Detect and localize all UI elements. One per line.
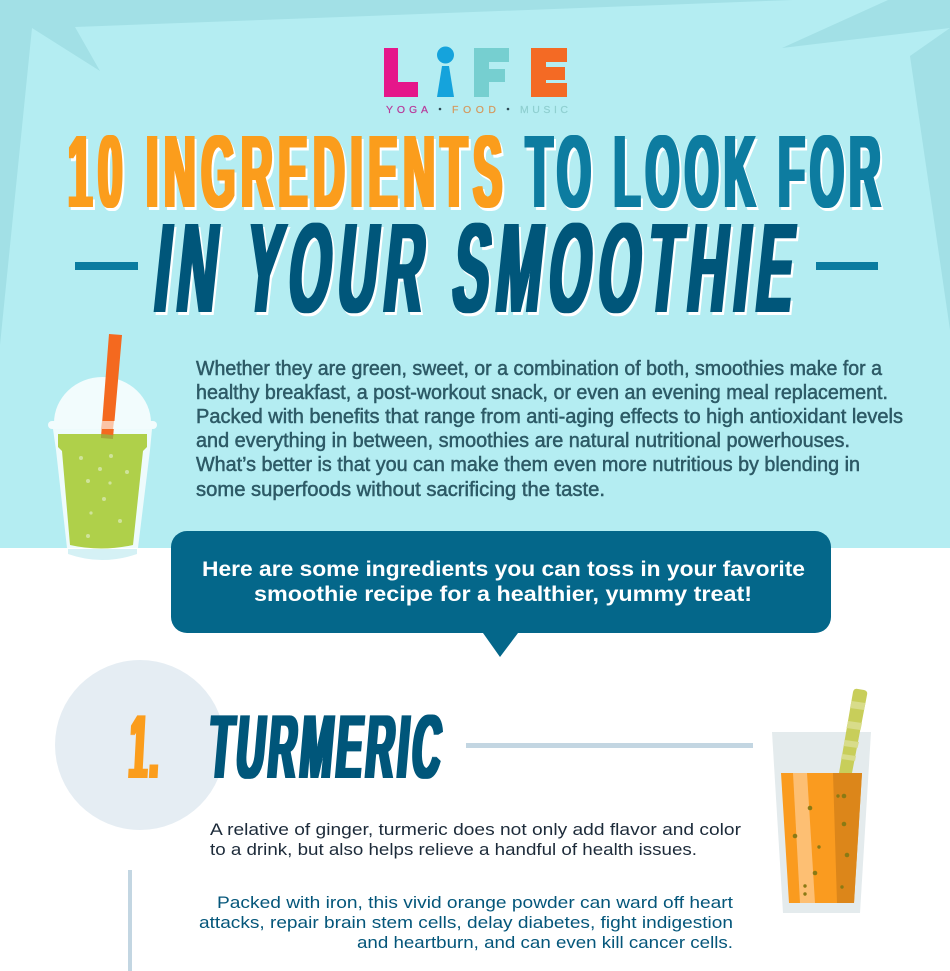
logo: LIFE	[384, 46, 568, 116]
logo: LIFE: MUSIC	[520, 104, 568, 116]
title dash right	[816, 262, 878, 270]
vertical connector	[128, 870, 132, 971]
intro paragraph: Packed with benefits that range from anti-aging effects to high antioxidant levels	[196, 406, 903, 428]
callout: Here are some ingredients you can toss in your favorite	[202, 558, 805, 581]
intro paragraph: and everything in between, smoothies are natural nutritional powerhouses.	[196, 430, 850, 452]
header background	[0, 0, 950, 548]
body text: turmeric intro	[210, 820, 741, 859]
heading rule	[466, 743, 753, 748]
body text: turmeric intro: A relative of ginger, turmeric does not only add flavor and color	[210, 820, 741, 839]
icon: green smoothie cup	[48, 334, 157, 560]
intro paragraph	[196, 358, 903, 501]
intro paragraph: some superfoods without sacrificing the taste.	[196, 479, 605, 501]
icon: orange juice glass	[772, 689, 871, 913]
intro paragraph: healthy breakfast, a post-workout snack, or even an evening meal replacement.	[196, 382, 888, 404]
number circle	[55, 660, 225, 830]
body text: turmeric benefits	[199, 893, 733, 952]
body text: turmeric benefits: Packed with iron, this vivid orange powder can ward off heart	[217, 893, 733, 912]
callout: smoothie recipe for a healthier, yummy treat!	[254, 583, 752, 606]
logo: LIFE: FOOD	[452, 104, 496, 116]
title	[68, 114, 886, 340]
callout	[171, 531, 831, 657]
text: 1.	[127, 697, 164, 798]
title dash left	[75, 262, 138, 270]
text: TURMERIC	[205, 696, 449, 798]
intro paragraph: What’s better is that you can make them even more nutritious by blending in	[196, 454, 860, 476]
body text: turmeric benefits: attacks, repair brain stem cells, delay diabetes, fight indigestion	[199, 913, 733, 932]
logo: LIFE: YOGA	[386, 104, 428, 116]
intro paragraph: Whether they are green, sweet, or a combination of both, smoothies make for a	[196, 358, 883, 380]
body text: turmeric intro: to a drink, but also helps relieve a handful of health issues.	[210, 840, 697, 859]
body text: turmeric benefits: and heartburn, and can even kill cancer cells.	[357, 933, 733, 952]
